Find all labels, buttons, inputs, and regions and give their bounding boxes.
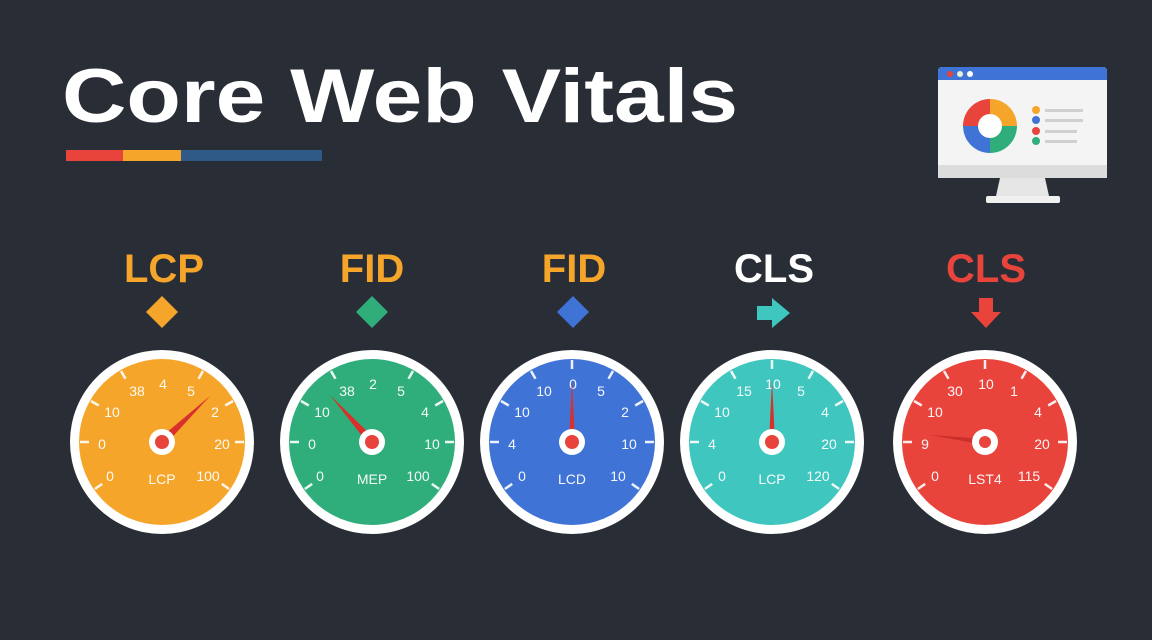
gauge 4: CLS teal: 4 bbox=[708, 436, 716, 452]
gauge 3: FID blue: 10 bbox=[621, 436, 637, 452]
gauge 4: CLS teal: 120 bbox=[806, 468, 830, 484]
gauge 5: CLS red: 9 bbox=[921, 436, 929, 452]
gauge 2: FID green: 10 bbox=[314, 404, 330, 420]
metric labels: FID bbox=[340, 247, 404, 291]
gauge 1: LCP orange: 10 bbox=[104, 404, 120, 420]
title: Core Web Vitals bbox=[62, 54, 738, 139]
gauge 4: CLS teal: 0 bbox=[718, 468, 726, 484]
metric labels: CLS bbox=[734, 247, 814, 291]
gauge 5: CLS red: 10 bbox=[927, 404, 943, 420]
gauge 5: CLS red: LST4 bbox=[968, 471, 1002, 487]
gauge 1: LCP orange: 2 bbox=[211, 404, 219, 420]
gauge 3: FID blue: LCD bbox=[558, 471, 586, 487]
gauge 3: FID blue: 10 bbox=[514, 404, 530, 420]
gauge 5: CLS red bbox=[893, 350, 1077, 534]
gauge 1: LCP orange: LCP bbox=[148, 471, 176, 487]
gauge 2: FID green: MEP bbox=[357, 471, 387, 487]
gauge 5: CLS red: 1 bbox=[1010, 383, 1018, 399]
gauge 2: FID green: 4 bbox=[421, 404, 429, 420]
gauge 2: FID green: 0 bbox=[308, 436, 316, 452]
metric labels: LCP bbox=[124, 247, 204, 291]
gauge 3: FID blue: 10 bbox=[610, 468, 626, 484]
gauge 4: CLS teal bbox=[680, 350, 864, 534]
metric labels: CLS bbox=[946, 247, 1026, 291]
gauge 4: CLS teal: 15 bbox=[736, 383, 752, 399]
icons under labels bbox=[146, 296, 1001, 328]
gauge 3: FID blue: 4 bbox=[508, 436, 516, 452]
gauge 1: LCP orange: 100 bbox=[196, 468, 220, 484]
gauge 5: CLS red: 0 bbox=[931, 468, 939, 484]
gauge 5: CLS red: 30 bbox=[947, 383, 963, 399]
gauge 1: LCP orange: 5 bbox=[187, 383, 195, 399]
gauge 5: CLS red: 10 bbox=[978, 376, 994, 392]
gauge 4: CLS teal: 5 bbox=[797, 383, 805, 399]
gauge 4: CLS teal: 20 bbox=[821, 436, 837, 452]
gauge 4: CLS teal: LCP bbox=[758, 471, 786, 487]
gauge 2: FID green bbox=[280, 350, 464, 534]
gauge 2: FID green: 2 bbox=[369, 376, 377, 392]
gauge 1: LCP orange: 20 bbox=[214, 436, 230, 452]
gauge 4: CLS teal: 10 bbox=[765, 376, 781, 392]
gauge 4: CLS teal: 10 bbox=[714, 404, 730, 420]
gauge 3: FID blue: 0 bbox=[518, 468, 526, 484]
gauge 1: LCP orange: 4 bbox=[159, 376, 167, 392]
gauge 2: FID green: 5 bbox=[397, 383, 405, 399]
gauge 2: FID green: 10 bbox=[424, 436, 440, 452]
gauge 2: FID green: 100 bbox=[406, 468, 430, 484]
icon: monitor bbox=[938, 67, 1107, 203]
gauge 2: FID green: 0 bbox=[316, 468, 324, 484]
metric labels bbox=[124, 247, 1026, 291]
gauge 5: CLS red: 4 bbox=[1034, 404, 1042, 420]
metric labels: FID bbox=[542, 247, 606, 291]
gauge 3: FID blue bbox=[480, 350, 664, 534]
title underline bar bbox=[66, 150, 322, 161]
gauge 5: CLS red: 20 bbox=[1034, 436, 1050, 452]
gauge 2: FID green: 38 bbox=[339, 383, 355, 399]
gauge 3: FID blue: 5 bbox=[597, 383, 605, 399]
gauge 5: CLS red: 115 bbox=[1018, 468, 1040, 484]
gauge 4: CLS teal: 4 bbox=[821, 404, 829, 420]
gauge 1: LCP orange bbox=[70, 350, 254, 534]
gauge 3: FID blue: 2 bbox=[621, 404, 629, 420]
gauge 3: FID blue: 0 bbox=[569, 376, 577, 392]
gauge 1: LCP orange: 0 bbox=[106, 468, 114, 484]
gauge 3: FID blue: 10 bbox=[536, 383, 552, 399]
gauge 1: LCP orange: 38 bbox=[129, 383, 145, 399]
gauge 1: LCP orange: 0 bbox=[98, 436, 106, 452]
